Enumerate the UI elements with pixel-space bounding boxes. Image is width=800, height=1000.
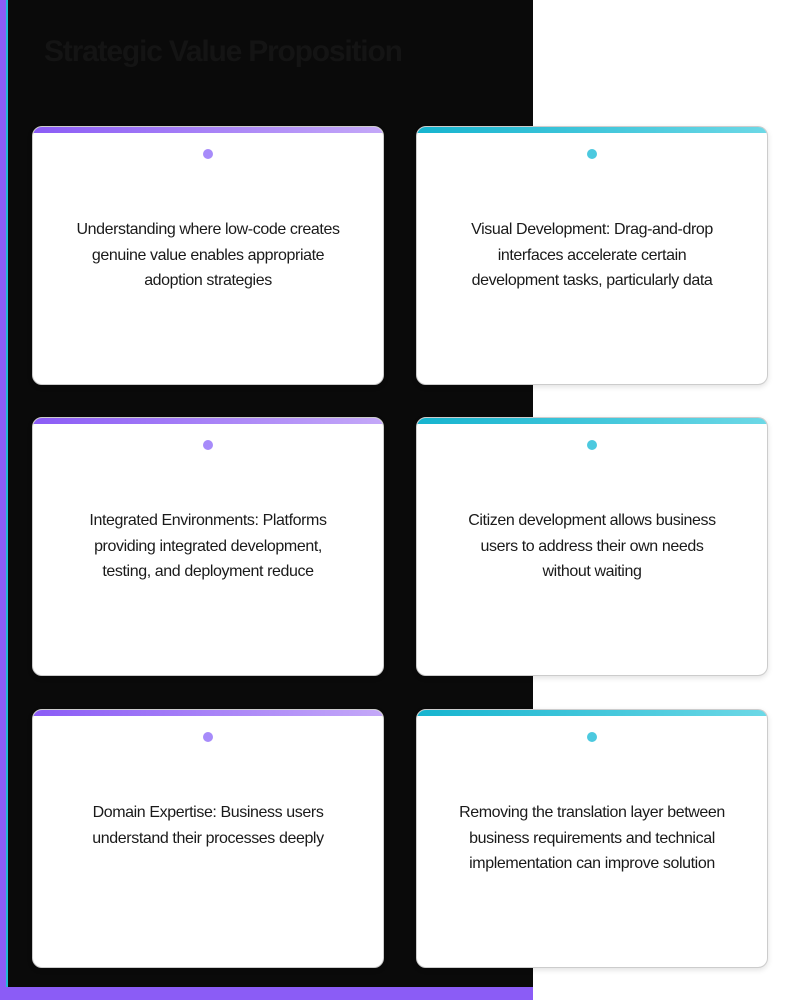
card: integrated environments: providing integrated development, <box>94 538 322 555</box>
card: domain expertise: understand their processes deeply <box>92 830 324 847</box>
card: translation layer: implementation can improve solution <box>469 855 715 872</box>
card: low-code value: genuine value enables appropriate <box>92 247 324 264</box>
card: visual development: Visual Development: Drag-and-drop <box>471 221 713 238</box>
card: translation layer <box>416 709 768 968</box>
card: integrated environments: Integrated Environments: Platforms <box>89 512 327 529</box>
card: visual development: development tasks, particularly data <box>472 272 712 289</box>
card: domain expertise: Domain Expertise: Business users <box>93 804 323 821</box>
card: citizen development: without waiting <box>543 563 641 580</box>
card: citizen development: users to address their own needs <box>481 538 703 555</box>
card: low-code value <box>32 126 384 385</box>
card: translation layer: business requirements and technical <box>469 830 715 847</box>
title: Strategic Value Proposition <box>44 35 402 68</box>
card: citizen development <box>416 417 768 676</box>
card: citizen development: Citizen development allows business <box>468 512 716 529</box>
card: visual development: interfaces accelerate certain <box>498 247 686 264</box>
card: low-code value: adoption strategies <box>144 272 272 289</box>
card: visual development <box>416 126 768 385</box>
card: translation layer: Removing the translation layer between <box>459 804 725 821</box>
card: integrated environments: testing, and deployment reduce <box>102 563 314 580</box>
card: integrated environments <box>32 417 384 676</box>
card: domain expertise <box>32 709 384 968</box>
card: low-code value: Understanding where low-code creates <box>76 221 340 238</box>
